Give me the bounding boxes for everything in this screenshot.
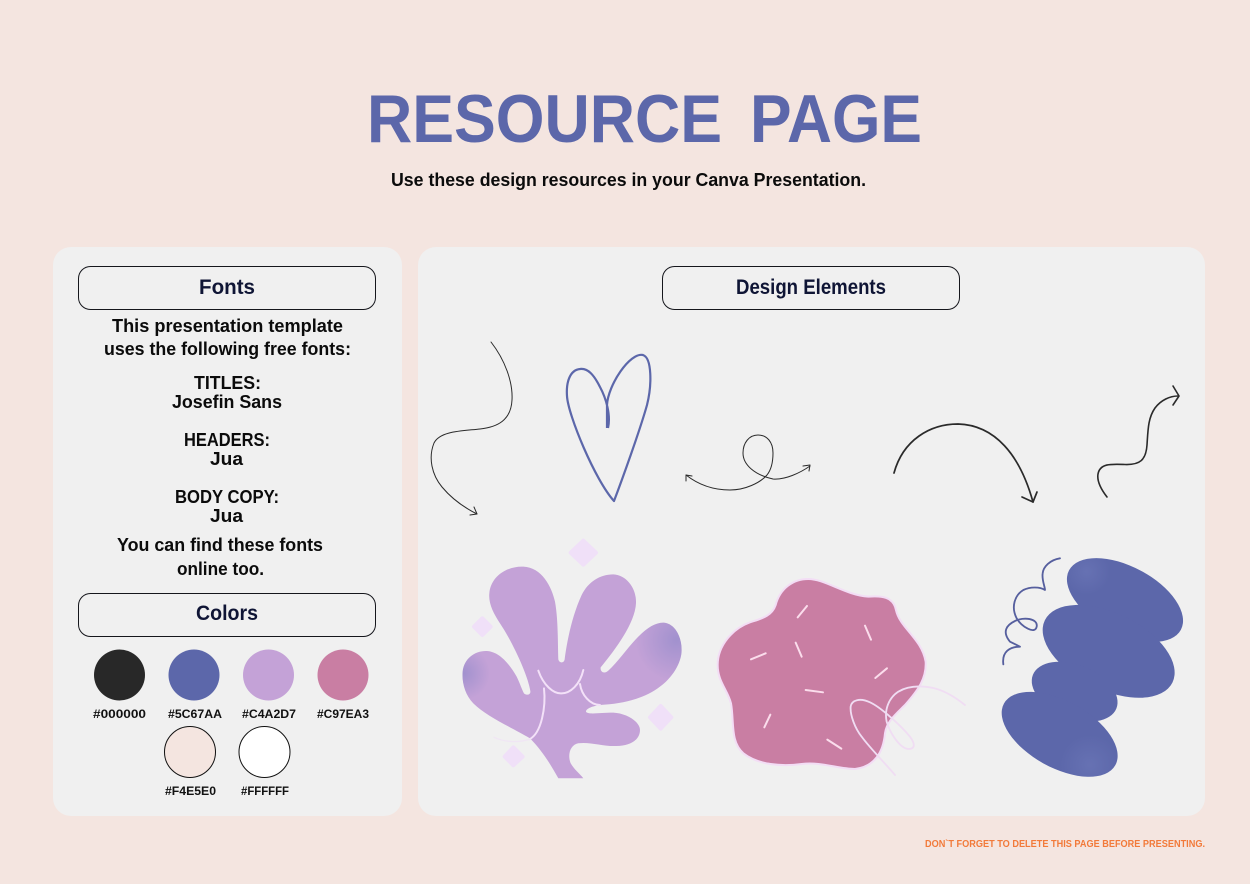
arrow: squiggle bbox=[1098, 386, 1179, 497]
heading: fonts: Fonts bbox=[199, 276, 255, 299]
text block: font list: uses the following free fonts: bbox=[104, 339, 351, 359]
text block: font list: This presentation template bbox=[112, 316, 343, 336]
color swatch: C4A2D7 bbox=[242, 650, 296, 721]
text block: font list: online too. bbox=[177, 559, 264, 579]
footer note: DON`T FORGET TO DELETE THIS PAGE BEFORE PRESENTING. bbox=[925, 839, 1205, 850]
color swatch: FFFFFF bbox=[239, 726, 290, 798]
text block: font list: HEADERS: bbox=[184, 430, 270, 450]
subtitle: Use these design resources in your Canva Presentation. bbox=[391, 169, 866, 190]
color swatch: C4A2D7: #C4A2D7 bbox=[242, 709, 296, 721]
text block: font list: TITLES: bbox=[194, 373, 261, 393]
color swatch: C97EA3: #C97EA3 bbox=[317, 709, 369, 721]
text block: font list: Josefin Sans bbox=[172, 392, 282, 412]
heading: colors: Colors bbox=[196, 602, 258, 625]
title: PAGE bbox=[750, 81, 922, 157]
icon: hand-drawn heart bbox=[567, 355, 650, 501]
color swatch: F4E5E0: #F4E5E0 bbox=[165, 786, 216, 798]
heading: fonts bbox=[78, 266, 376, 310]
illustration: pink blob bbox=[718, 579, 965, 775]
illustration: purple flower bbox=[462, 538, 682, 778]
title: RESOURCE bbox=[367, 81, 722, 157]
heading: design elements: Design Elements bbox=[736, 276, 886, 299]
panel: design elements bbox=[418, 247, 1205, 816]
title bbox=[367, 81, 922, 157]
text block: font list bbox=[104, 316, 351, 579]
color swatch: 000000 bbox=[93, 650, 146, 721]
illustration: blue blob with squiggle bbox=[1002, 557, 1184, 777]
text block: font list: Jua bbox=[210, 506, 244, 526]
panel: fonts and colors bbox=[53, 247, 402, 816]
color swatch: C97EA3 bbox=[317, 650, 369, 721]
arrow: curved arc bbox=[894, 424, 1037, 502]
color swatch: 5C67AA: #5C67AA bbox=[168, 709, 222, 721]
heading: design elements bbox=[662, 266, 960, 310]
arrow: wavy thin line bbox=[431, 342, 512, 515]
heading: colors bbox=[78, 594, 376, 636]
text block: font list: BODY COPY: bbox=[175, 487, 279, 507]
color swatch: FFFFFF: #FFFFFF bbox=[241, 786, 289, 798]
arrow: double-headed loop bbox=[686, 435, 810, 490]
color swatch: F4E5E0 bbox=[164, 726, 216, 798]
text block: font list: You can find these fonts bbox=[117, 535, 323, 555]
color swatch: 000000: #000000 bbox=[93, 709, 146, 721]
text block: font list: Jua bbox=[210, 449, 244, 469]
color swatch: 5C67AA bbox=[168, 650, 222, 721]
sparkles bbox=[474, 541, 671, 765]
